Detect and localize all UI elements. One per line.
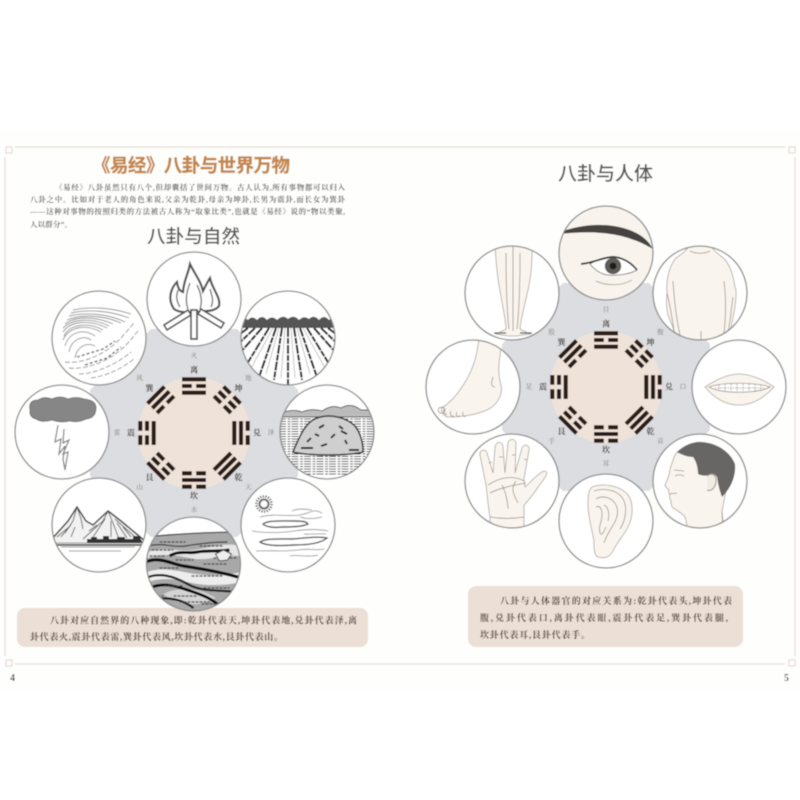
icon: eye [559,206,653,300]
trigram labels: 首 [657,436,664,445]
icon: foot [426,339,520,434]
trigram: li [594,333,618,347]
intro paragraph [29,182,346,229]
trigram labels: 股 [548,327,555,336]
page frame [5,147,795,666]
trigram: qian [626,407,652,433]
trigram labels: 足 [526,382,533,390]
intro paragraph: ——这种对事物的按照归类的方法被古人称为“取象比类”,也就是《易经》说的“物以类聚, [29,206,345,216]
page number 5: 5 [784,673,789,684]
title: left page: 《易经》八卦与世界万物 [92,155,290,176]
intro paragraph: 人以群分”。 [30,219,72,229]
icon: field [240,290,336,386]
intro paragraph: 《易经》八卦虽然只有八个,但却囊括了世间万物。古人认为,所有事物都可以归入 [55,182,346,192]
trigram labels: 巽 [558,337,566,347]
icon: torso [653,245,747,343]
trigram labels: 山 [136,482,143,491]
trigram: li [182,379,206,393]
center disc [550,331,662,443]
trigram labels: 耳 [603,460,610,468]
trigram labels: 离 [190,364,198,374]
callout: nature text box: 卦代表火,震卦代表雷,巽卦代表风,坎卦代表水,艮卦代表山。 [30,631,283,642]
trigram labels: 泽 [268,428,275,436]
trigram: kan [182,473,206,487]
icon: water waves [146,517,242,614]
icon: lake [279,385,375,479]
trigram labels: 震 [127,428,135,438]
gray star backdrop [90,329,298,537]
callout: body text box: 八卦与人体器官的对应关系为:乾卦代表头,坤卦代表 [500,595,732,606]
trigram labels: 乾 [646,426,654,436]
trigram labels: 水 [191,504,198,514]
icon: wind swirl [52,291,146,385]
heading: 八卦与人体: 八卦与人体 [558,163,653,185]
trigram labels: 腹 [657,327,664,336]
icon: hand [465,434,559,531]
panel: bagua and human body [426,206,786,568]
trigram: kun [626,341,652,367]
trigram labels: 火 [191,350,198,360]
center disc [138,377,250,489]
trigram: zhen [552,375,566,399]
trigram labels: 乾 [234,472,242,482]
panel: bagua and nature [15,252,375,614]
callout: nature text box: 八卦对应自然界的八种现象,即:乾卦代表天,坤卦代表地,兑卦代表泽,离 [50,614,357,626]
trigram: gen [560,407,586,433]
trigram labels: 坤 [234,383,242,393]
trigram labels: 风 [136,373,143,382]
trigram labels: 坎 [602,444,610,454]
callout: body text box: 坎卦代表耳,艮卦代表手。 [480,629,590,640]
icon: thunder cloud and lightning [15,385,109,479]
trigram: xun [148,387,174,413]
trigram labels: 兑 [665,382,673,392]
trigram: dui [234,421,248,445]
trigram: qian [214,453,240,479]
icon: sun and clouds [241,478,335,572]
trigram labels: 手 [548,436,555,445]
heading: 八卦与自然: 八卦与自然 [147,226,240,247]
intro paragraph: 八卦之中。比如对于老人的角色来说,父亲为乾卦,母亲为坤卦,长男为震卦,而长女为巽卦 [30,194,346,204]
trigram labels: 雷 [114,428,121,436]
trigram labels: 天 [245,483,252,491]
icon: mouth [692,340,786,434]
callout: body text box: 腹,兑卦代表口,离卦代表眼,震卦代表足,巽卦代表腿, [480,612,728,623]
trigram labels: 离 [602,318,610,328]
trigram labels: 坤 [646,337,654,347]
icon: legs [465,245,559,340]
callout: nature text box [17,608,368,647]
trigram: dui [646,375,660,399]
trigram labels: 兑 [253,428,261,438]
page number 4: 4 [10,673,15,684]
trigram labels: 震 [539,382,547,392]
trigram labels [526,306,686,468]
icon: mountains [51,478,147,572]
trigram labels: 口 [680,382,686,390]
icon: ear [559,474,653,568]
trigram labels: 艮 [146,473,154,482]
callout: body text box [468,586,743,647]
trigram labels: 坎 [190,490,198,500]
trigram labels: 地 [245,373,252,382]
gray star backdrop [502,283,710,491]
trigram: kan [594,427,618,441]
icon: fire [147,252,241,346]
icon: head profile [653,434,747,531]
trigram: kun [214,387,240,413]
trigram: gen [148,453,174,479]
trigram: zhen [140,421,154,445]
trigram labels: 巽 [146,383,154,393]
trigram: xun [560,341,586,367]
trigram labels [114,350,275,514]
trigram labels: 目 [603,306,609,314]
trigram labels: 艮 [558,427,566,436]
